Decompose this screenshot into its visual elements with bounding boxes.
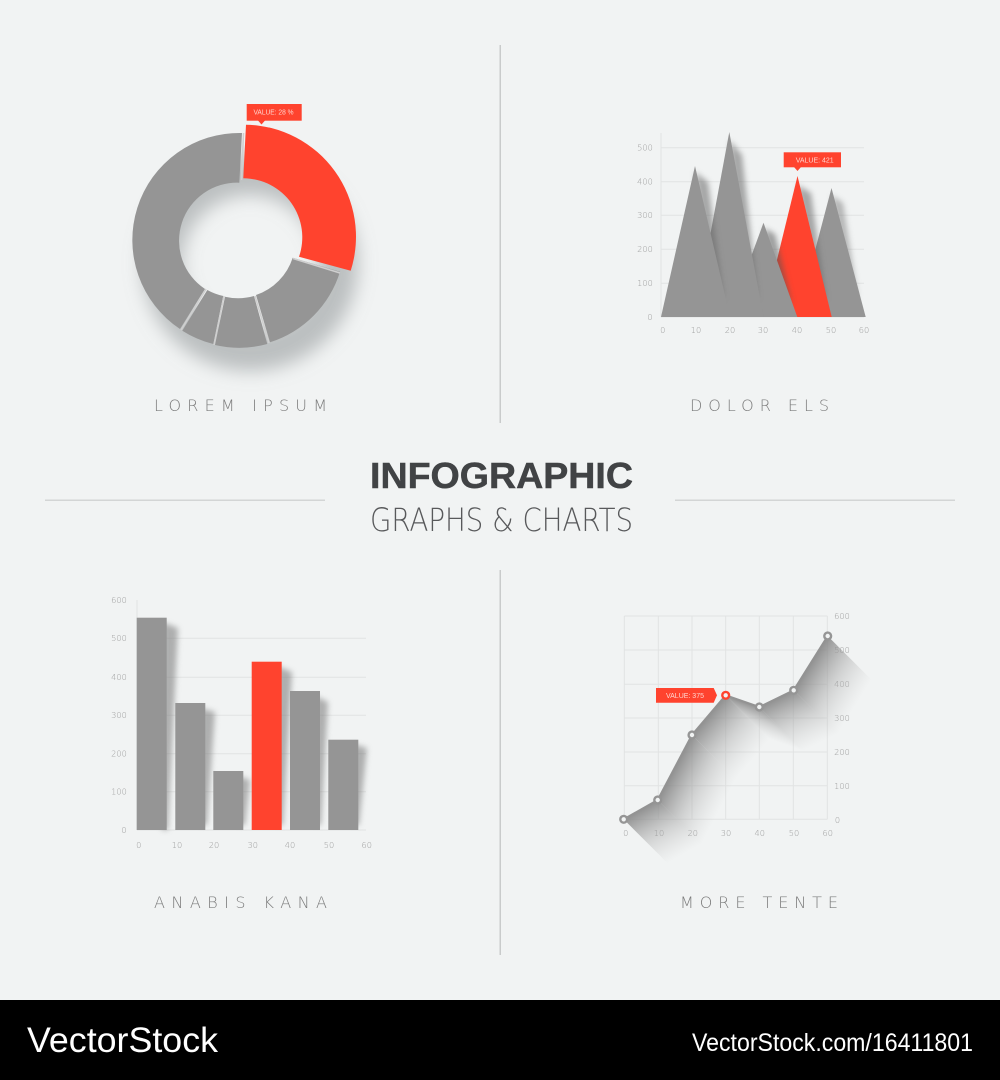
mountain x axis labels [660, 325, 869, 335]
line grid [624, 616, 827, 819]
mountain triangles with shadows [661, 132, 866, 317]
line x axis labels: 20 [687, 828, 698, 838]
line x axis labels [623, 828, 833, 838]
bar y axis labels: 300 [111, 710, 127, 720]
donut red slice [243, 125, 356, 271]
bar shadows [162, 622, 367, 830]
donut slice separators [181, 133, 340, 345]
line x axis labels: 40 [754, 828, 765, 838]
line x axis labels: 30 [721, 828, 731, 838]
bar y axis labels: 400 [111, 672, 127, 682]
bar x axis labels: 0 [136, 840, 141, 850]
divider: right horizontal [675, 500, 955, 501]
line x axis labels: 0 [623, 828, 628, 838]
title: INFOGRAPHIC [370, 455, 633, 496]
line value tooltip [656, 688, 717, 703]
bar y axis labels: 200 [111, 748, 127, 758]
data line [624, 636, 828, 819]
line y axis labels [834, 611, 850, 825]
donut value tooltip: VALUE: 28 % [254, 110, 294, 116]
line value tooltip: VALUE: 375 [666, 693, 704, 700]
bar y axis labels: 600 [111, 595, 127, 605]
line y axis labels: 500 [834, 645, 850, 655]
bar x axis labels: 40 [285, 840, 295, 850]
mountain y axis labels: 300 [637, 210, 653, 220]
line y axis labels: 400 [834, 679, 850, 689]
donut grey slices [132, 133, 340, 348]
mountain y axis labels [637, 142, 653, 322]
bar grid lines [137, 600, 366, 830]
grey bars [137, 618, 358, 830]
mountain value tooltip: VALUE: 421 [796, 158, 834, 164]
mountain value tooltip [784, 152, 841, 171]
mountain x axis labels: 10 [691, 325, 701, 335]
mountain y axis labels: 100 [637, 278, 653, 288]
mountain x axis labels: 30 [758, 325, 768, 335]
mountain grid lines [661, 133, 864, 317]
divider: left horizontal [45, 500, 325, 501]
line x axis labels: 50 [789, 828, 799, 838]
mountain x axis labels: 40 [792, 325, 802, 335]
bar y axis labels: 500 [111, 633, 127, 643]
divider: top vertical [500, 45, 501, 423]
data markers [620, 633, 831, 823]
bar x axis labels: 20 [209, 840, 219, 850]
red bar [252, 662, 282, 830]
divider: bottom vertical [500, 570, 501, 955]
mountain x axis labels: 60 [859, 325, 869, 335]
line y axis labels: 0 [835, 815, 840, 825]
donut shadow [162, 175, 338, 351]
line y axis labels: 300 [834, 713, 850, 723]
mountain x axis labels: 20 [725, 325, 735, 335]
bar y axis labels [111, 595, 127, 835]
footer logo text: VectorStock [27, 1021, 219, 1060]
mountain x axis labels: 0 [660, 325, 665, 335]
line long shadow [624, 636, 872, 863]
highlighted marker [722, 692, 729, 699]
donut value tooltip [247, 104, 302, 124]
donut caption: LOREM IPSUM [154, 396, 327, 415]
mountain y axis labels: 0 [647, 312, 653, 322]
mountain y axis labels: 200 [637, 244, 653, 254]
bar x axis labels: 60 [361, 840, 372, 850]
footer url text: VectorStock.com/16411801 [692, 1029, 973, 1057]
panel: bar chart [111, 595, 372, 850]
panel: donut chart [132, 104, 356, 351]
subtitle: GRAPHS & CHARTS [370, 501, 633, 539]
line x axis labels: 60 [822, 828, 833, 838]
mountain y axis labels: 400 [637, 176, 653, 186]
panel: mountain chart [637, 132, 869, 335]
bar x axis labels: 10 [172, 840, 182, 850]
bar x axis labels: 30 [247, 840, 258, 850]
bar x axis labels: 50 [324, 840, 334, 850]
mountain x axis labels: 50 [826, 325, 836, 335]
line y axis labels: 200 [834, 747, 850, 757]
mountain y axis labels: 500 [637, 142, 653, 152]
line y axis labels: 100 [834, 781, 850, 791]
panel: line chart [620, 611, 872, 863]
footer bar [0, 1000, 1000, 1080]
bar y axis labels: 0 [121, 825, 127, 835]
line x axis labels: 10 [654, 828, 664, 838]
line y axis labels: 600 [834, 611, 850, 621]
bar y axis labels: 100 [111, 786, 127, 796]
bar x axis labels [136, 840, 372, 850]
mountain caption: DOLOR ELS [690, 396, 829, 415]
line caption: MORE TENTE [680, 893, 838, 912]
bar caption: ANABIS KANA [154, 893, 327, 912]
